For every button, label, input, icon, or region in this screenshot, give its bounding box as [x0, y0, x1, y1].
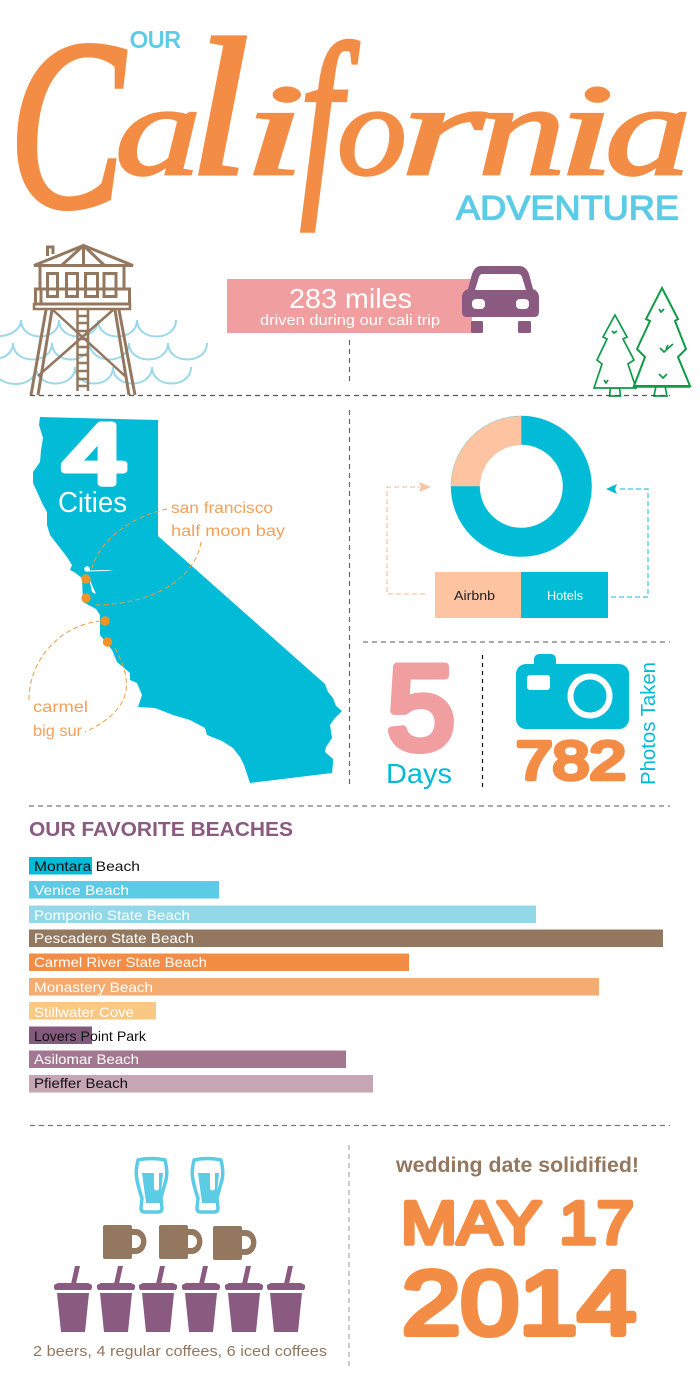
bar: asilomar: Asilomar Beach	[34, 1051, 139, 1067]
bar chart: favorite beaches	[29, 857, 663, 1092]
title: california script: i	[558, 58, 614, 203]
label: cities: Cities	[58, 487, 127, 519]
icons: mugs	[103, 1225, 256, 1260]
title: california script: a	[605, 58, 691, 203]
bar: stillwater: Stillwater Cove	[34, 1004, 134, 1020]
beer one	[136, 1158, 167, 1212]
icons: beers	[136, 1158, 223, 1212]
banner: miles driven	[227, 279, 472, 333]
icon: fire lookout tower	[31, 246, 135, 395]
title: california script: a	[115, 58, 201, 203]
bar: monastery	[29, 978, 599, 996]
title: california script: f	[300, 3, 342, 232]
heading: our favorite beaches: OUR FAVORITE BEACHES	[29, 819, 293, 841]
arrow: hotels to donut	[606, 484, 648, 597]
iced coffee one	[54, 1266, 92, 1332]
bar: venice: Venice Beach	[34, 882, 129, 898]
map location dots	[81, 574, 112, 647]
bar: monastery: Monastery Beach	[34, 979, 153, 995]
label: carmel: carmel	[33, 699, 88, 716]
bar: asilomar	[29, 1050, 346, 1068]
title: california script: i	[243, 58, 306, 203]
bar: carmel river	[29, 954, 409, 971]
bar: lovers point: Lovers Point Park	[34, 1028, 147, 1044]
date: 2014: 2014	[402, 1254, 636, 1354]
mug three	[213, 1226, 256, 1260]
arrow: airbnb to donut	[387, 482, 431, 594]
legend: airbnb	[435, 572, 521, 618]
bar: stillwater	[29, 1002, 156, 1020]
map connector lines	[29, 509, 201, 732]
icon: camera	[516, 654, 629, 729]
title: california script: l	[189, 0, 249, 217]
iced coffee four	[182, 1266, 220, 1332]
date: may 17: MAY 17	[401, 1190, 634, 1256]
caption: drinks tally: 2 beers, 4 regular coffees, 6 iced coffees	[33, 1343, 327, 1360]
donut chart: lodging	[451, 416, 577, 542]
numeral: 4: 4	[63, 407, 126, 501]
mug one	[103, 1225, 146, 1259]
bar: venice	[29, 881, 219, 898]
title: california script: n	[478, 58, 566, 203]
title: california script: r	[400, 58, 485, 203]
label: photos taken: Photos Taken	[638, 662, 660, 785]
heading word: adventure: ADVENTURE	[456, 190, 679, 228]
bar: pfieffer	[29, 1075, 373, 1092]
iced coffee three	[139, 1266, 177, 1332]
heading word: our: OUR	[130, 26, 181, 52]
illustration: waves	[0, 320, 207, 384]
bar: montara: Montara Beach	[34, 858, 140, 874]
iced coffee six	[267, 1266, 305, 1332]
miles caption: driven during our cali trip	[260, 312, 440, 329]
icon: pine trees	[594, 288, 690, 396]
bar: pomponio: Pomponio State Beach	[34, 907, 190, 923]
bar: pescadero	[29, 930, 663, 947]
legend: airbnb: Airbnb	[454, 588, 495, 603]
bar: pescadero: Pescadero State Beach	[34, 930, 194, 946]
text: wedding date solidified: wedding date solidified!	[395, 1154, 639, 1177]
miles number: 283 miles	[289, 283, 412, 314]
label: days: Days	[386, 758, 452, 789]
label: big sur: big sur	[33, 723, 83, 740]
label: san francisco: san francisco	[171, 500, 273, 517]
icons: iced coffees	[54, 1266, 305, 1332]
bar: pomponio	[29, 906, 536, 923]
legend: hotels	[521, 572, 608, 618]
title: california script	[9, 0, 691, 260]
beer two	[192, 1158, 223, 1212]
iced coffee five	[225, 1266, 263, 1332]
bar: pfieffer: Pfieffer Beach	[34, 1075, 128, 1091]
bay detail	[84, 566, 114, 594]
numeral: 5: 5	[387, 641, 455, 775]
legend: hotels: Hotels	[547, 588, 583, 603]
icon: car	[462, 266, 539, 333]
bar: carmel river: Carmel River State Beach	[34, 954, 207, 970]
title: california script: o	[337, 58, 407, 203]
label: half moon bay: half moon bay	[171, 523, 285, 540]
iced coffee two	[97, 1266, 135, 1332]
mug two	[159, 1225, 202, 1259]
map: california	[33, 417, 342, 783]
number: photos taken: 782	[516, 731, 626, 791]
